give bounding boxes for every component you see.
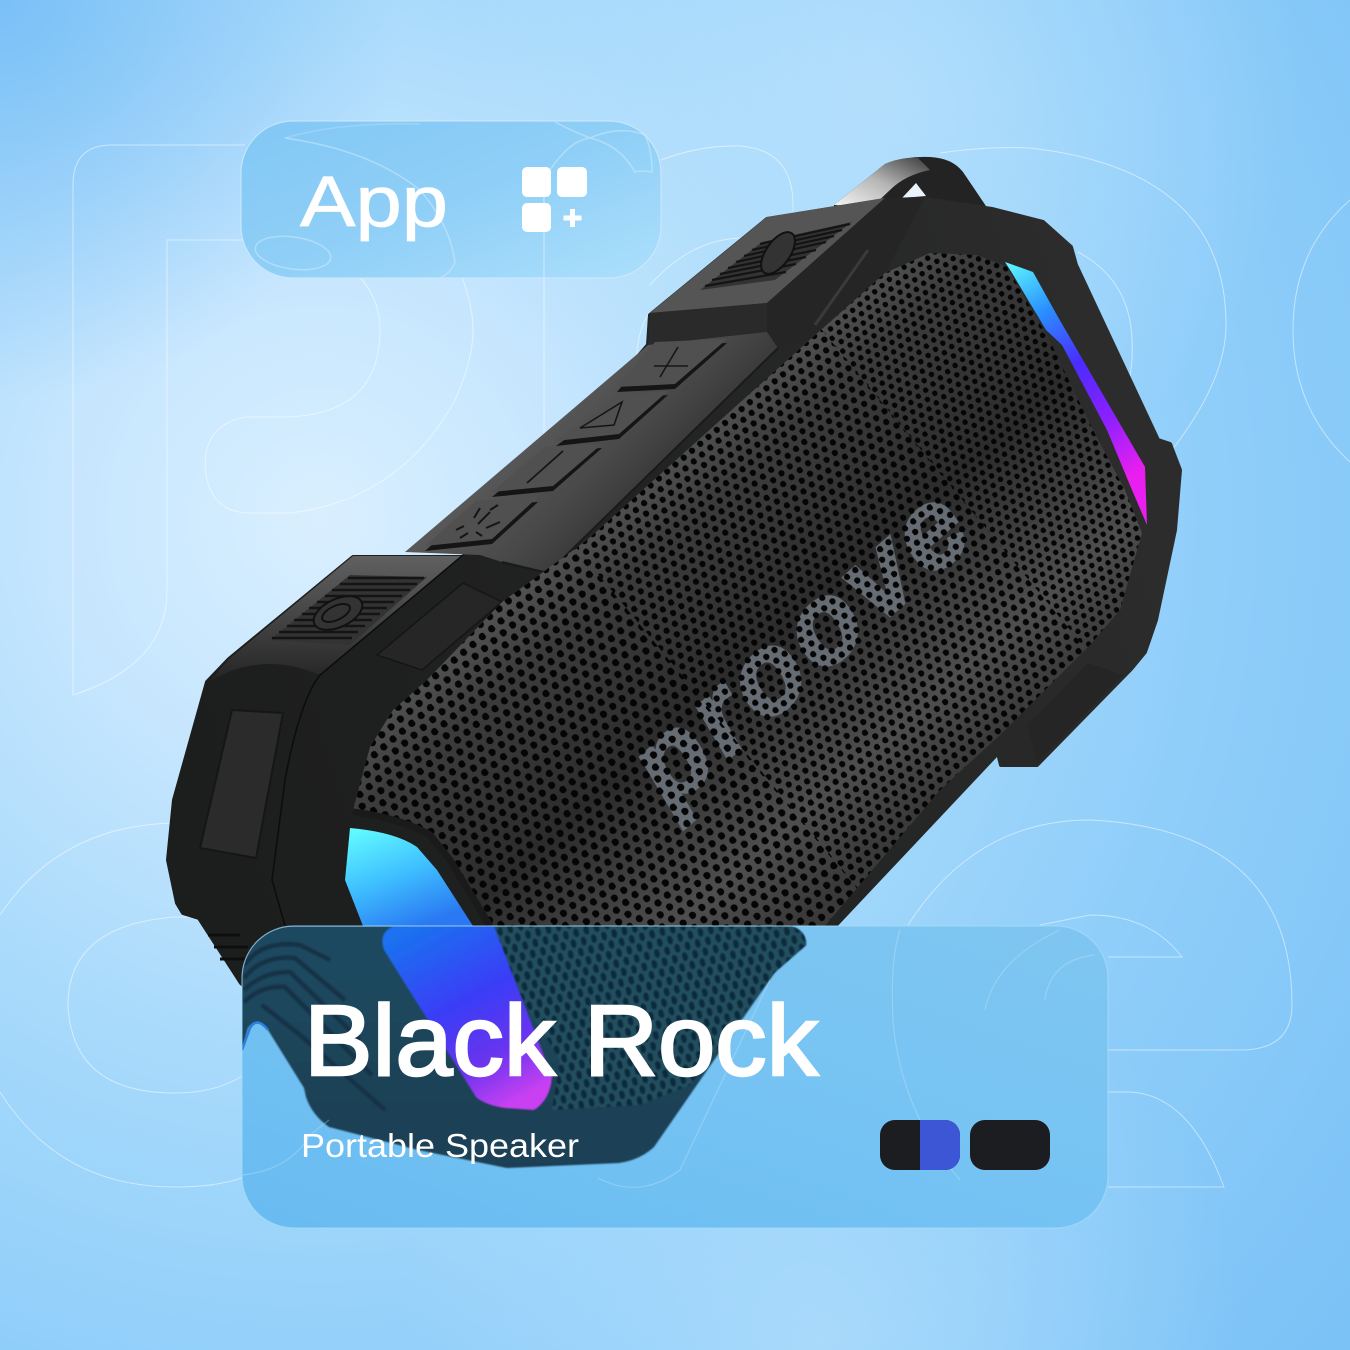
button band	[405, 332, 778, 573]
refracted highlight	[242, 1022, 268, 1050]
bottom glass panel: Black Rock	[230, 926, 1108, 1228]
logo on grille: proove	[601, 463, 993, 830]
button: plus	[617, 339, 727, 392]
title: Black Rock	[304, 985, 819, 1097]
right rim notch	[815, 250, 868, 325]
subtitle: Portable Speaker	[301, 1127, 579, 1164]
button strip lower edge	[502, 348, 778, 573]
icon: app grid plus	[522, 167, 587, 232]
button: light	[425, 497, 538, 551]
refracted tread lines	[244, 944, 385, 1110]
right rim face	[767, 197, 925, 348]
colour swatch: black and blue	[880, 1120, 960, 1170]
speaker grille	[353, 253, 1142, 926]
button: minus	[492, 444, 602, 497]
body bottom tread	[208, 935, 254, 959]
background outline letters	[0, 145, 1350, 1187]
rim around left LED	[353, 812, 490, 926]
left rim notch	[377, 583, 502, 670]
handle	[834, 157, 990, 212]
speaker body silhouette	[168, 199, 1180, 1000]
left vent grille	[270, 575, 427, 645]
speaker	[168, 157, 1200, 1000]
top glass panel: App	[241, 121, 661, 278]
right LED strip	[1005, 262, 1147, 525]
left end top face	[209, 556, 463, 682]
App label: App	[300, 163, 448, 242]
left LED strip	[345, 828, 473, 926]
left end recessed label	[200, 710, 283, 858]
right vent grille	[700, 222, 852, 290]
panel border	[242, 926, 1108, 1228]
faint lines inside panel	[242, 930, 1095, 1187]
refracted silhouette	[230, 926, 806, 1168]
refracted grille	[489, 926, 806, 1110]
grille holes	[356, 253, 1140, 926]
refracted speaker in glass	[230, 926, 806, 1168]
right foot notch	[1027, 663, 1123, 763]
left end seam	[272, 555, 463, 926]
panel caustic reflections	[253, 122, 652, 278]
colour swatch: black	[970, 1120, 1050, 1170]
refracted LED strip	[382, 926, 552, 1110]
button: play	[556, 391, 668, 446]
right top face	[650, 198, 885, 313]
